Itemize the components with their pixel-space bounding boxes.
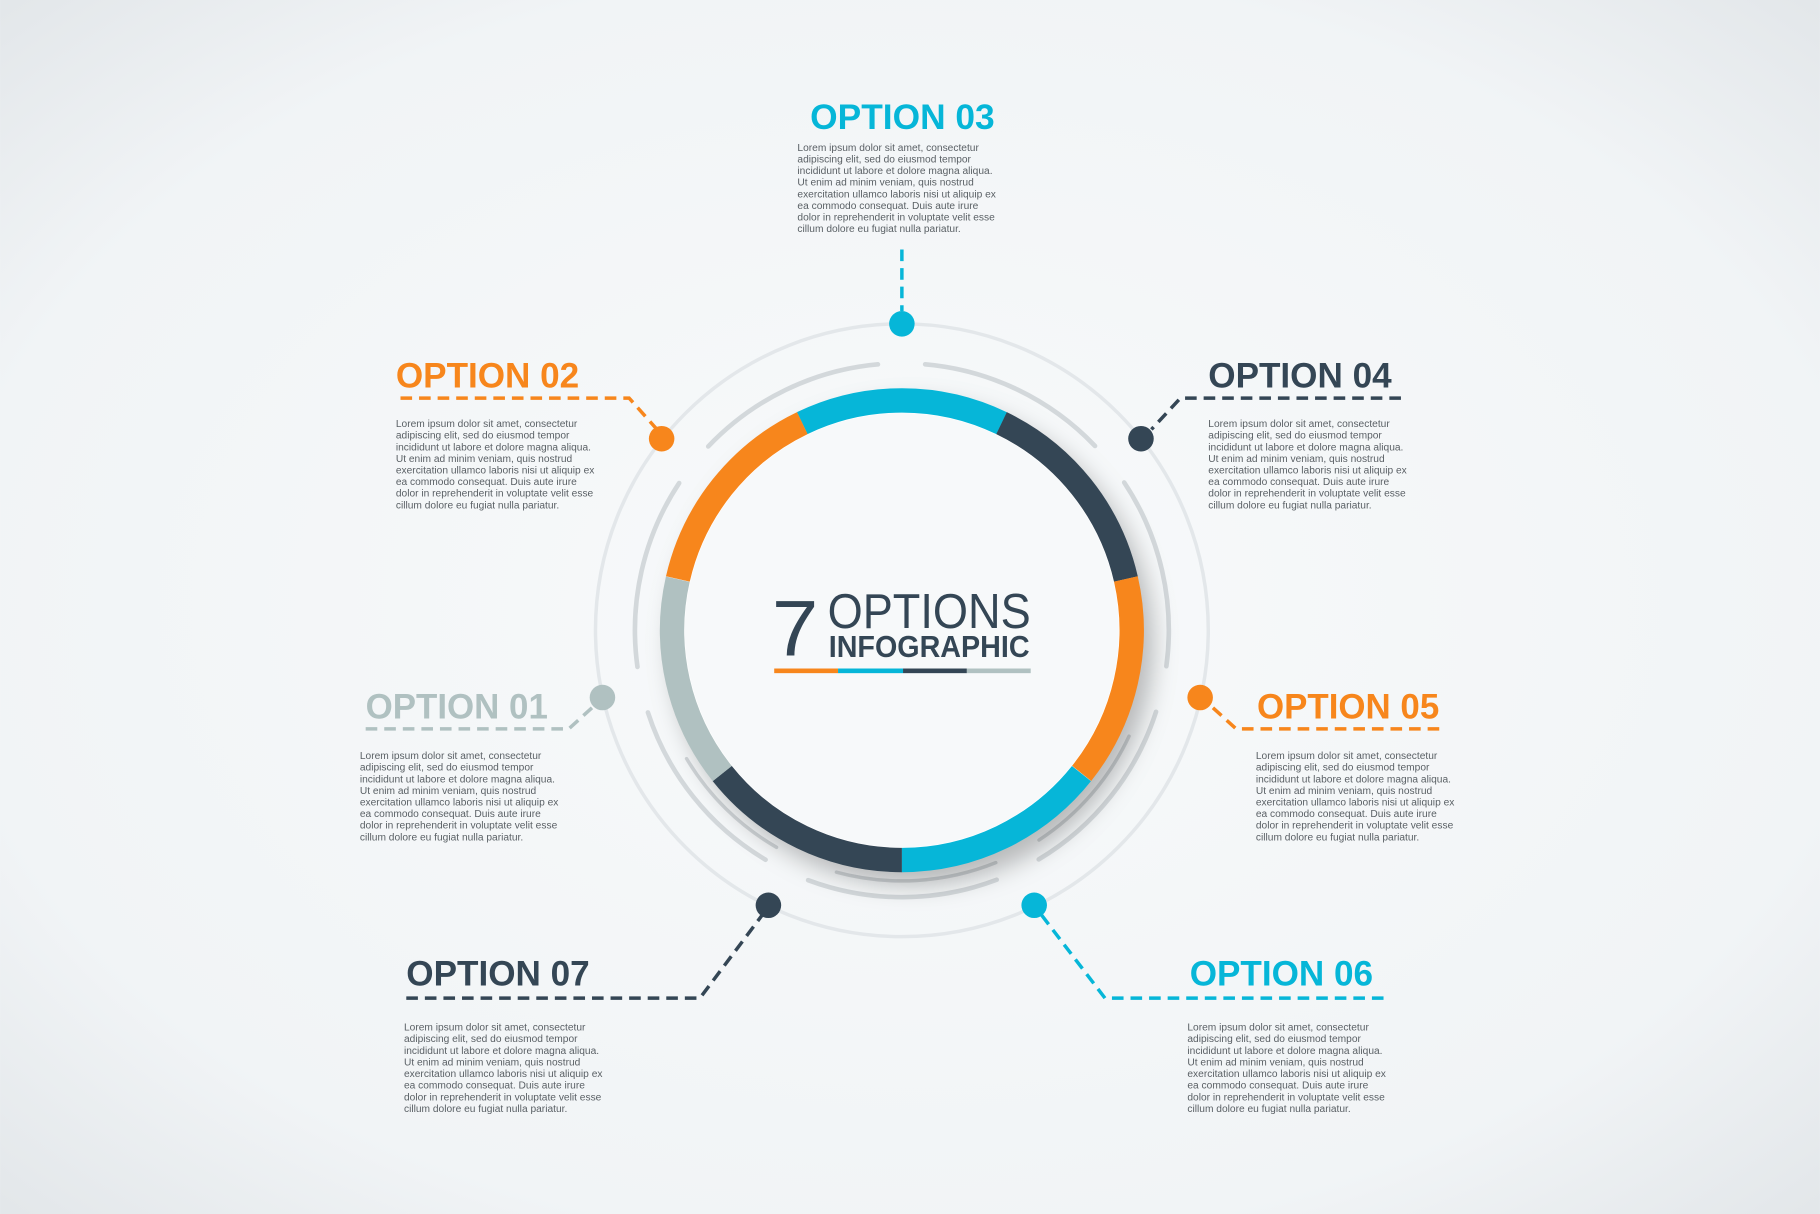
body text blocks: incididunt ut labore et dolore magna aliqua. — [396, 442, 591, 453]
body text blocks: ea commodo consequat. Duis aute irure — [1208, 477, 1390, 488]
body text blocks: Lorem ipsum dolor sit amet, consectetur — [404, 1023, 586, 1034]
body text blocks: cillum dolore eu fugiat nulla pariatur. — [360, 832, 523, 843]
body text blocks: incididunt ut labore et dolore magna aliqua. — [404, 1046, 599, 1057]
body text blocks: exercitation ullamco laboris nisi ut aliquip ex — [1187, 1069, 1386, 1080]
body text blocks: Ut enim ad minim veniam, quis nostrud — [360, 786, 537, 797]
body text blocks: incididunt ut labore et dolore magna aliqua. — [360, 774, 555, 785]
body text blocks: exercitation ullamco laboris nisi ut aliquip ex — [1208, 466, 1407, 477]
option headings: OPTION 07 — [406, 954, 590, 993]
body text blocks: exercitation ullamco laboris nisi ut aliquip ex — [1256, 797, 1454, 808]
body text blocks — [360, 143, 1454, 1115]
option headings — [366, 98, 1439, 993]
body text blocks: dolor in reprehenderit in voluptate velit esse — [404, 1092, 602, 1103]
body text blocks: ea commodo consequat. Duis aute irure — [404, 1081, 585, 1092]
center title: INFOGRAPHIC — [829, 631, 1030, 664]
body text blocks: exercitation ullamco laboris nisi ut aliquip ex — [360, 797, 558, 808]
body text blocks: dolor in reprehenderit in voluptate velit esse — [360, 821, 558, 832]
body text blocks: cillum dolore eu fugiat nulla pariatur. — [1187, 1104, 1351, 1115]
body text blocks: Lorem ipsum dolor sit amet, consectetur — [797, 143, 979, 154]
body text blocks: dolor in reprehenderit in voluptate velit esse — [1256, 821, 1454, 832]
body text blocks: ea commodo consequat. Duis aute irure — [360, 809, 541, 820]
body text blocks: adipiscing elit, sed do eiusmod tempor — [1208, 431, 1382, 442]
body text blocks: Lorem ipsum dolor sit amet, consectetur — [1256, 751, 1438, 762]
body text blocks: incididunt ut labore et dolore magna aliqua. — [797, 166, 993, 177]
body text blocks: exercitation ullamco laboris nisi ut aliquip ex — [396, 466, 594, 477]
body text blocks: cillum dolore eu fugiat nulla pariatur. — [404, 1104, 567, 1115]
body text blocks: Ut enim ad minim veniam, quis nostrud — [1187, 1057, 1364, 1068]
center title — [772, 585, 1031, 673]
body text blocks: Lorem ipsum dolor sit amet, consectetur — [1208, 419, 1390, 430]
body text blocks: dolor in reprehenderit in voluptate velit esse — [1208, 489, 1406, 500]
body text blocks: Ut enim ad minim veniam, quis nostrud — [797, 178, 974, 189]
body text blocks: adipiscing elit, sed do eiusmod tempor — [396, 431, 570, 442]
body text blocks: dolor in reprehenderit in voluptate velit esse — [1187, 1092, 1385, 1103]
center title: 7 — [772, 585, 818, 673]
center title: OPTIONS — [828, 585, 1031, 639]
option headings: OPTION 01 — [366, 687, 548, 726]
body text blocks: cillum dolore eu fugiat nulla pariatur. — [396, 500, 559, 511]
body text blocks: adipiscing elit, sed do eiusmod tempor — [797, 154, 972, 165]
option headings: OPTION 04 — [1208, 357, 1392, 396]
body text blocks: Ut enim ad minim veniam, quis nostrud — [1208, 454, 1385, 465]
option headings: OPTION 05 — [1257, 687, 1439, 726]
middle arcs — [524, 253, 1279, 1008]
body text blocks: ea commodo consequat. Duis aute irure — [1187, 1081, 1369, 1092]
body text blocks: ea commodo consequat. Duis aute irure — [396, 477, 577, 488]
body text blocks: dolor in reprehenderit in voluptate velit esse — [396, 489, 594, 500]
body text blocks: incididunt ut labore et dolore magna aliqua. — [1208, 442, 1403, 453]
option headings: OPTION 06 — [1190, 954, 1373, 993]
body text blocks: Ut enim ad minim veniam, quis nostrud — [1256, 786, 1433, 797]
body text blocks: adipiscing elit, sed do eiusmod tempor — [1187, 1034, 1362, 1045]
body text blocks: Lorem ipsum dolor sit amet, consectetur — [396, 419, 578, 430]
outer thin ring — [595, 324, 1208, 937]
body text blocks: adipiscing elit, sed do eiusmod tempor — [404, 1034, 578, 1045]
body text blocks: incididunt ut labore et dolore magna aliqua. — [1187, 1046, 1383, 1057]
body text blocks: cillum dolore eu fugiat nulla pariatur. — [1208, 500, 1372, 511]
body text blocks: Ut enim ad minim veniam, quis nostrud — [404, 1057, 581, 1068]
body text blocks: ea commodo consequat. Duis aute irure — [1256, 809, 1437, 820]
body text blocks: dolor in reprehenderit in voluptate velit esse — [797, 213, 995, 224]
body text blocks: incididunt ut labore et dolore magna aliqua. — [1256, 774, 1451, 785]
body text blocks: adipiscing elit, sed do eiusmod tempor — [1256, 763, 1430, 774]
connectors — [366, 250, 1439, 998]
body text blocks: exercitation ullamco laboris nisi ut aliquip ex — [404, 1069, 602, 1080]
option headings: OPTION 03 — [810, 98, 995, 137]
body text blocks: exercitation ullamco laboris nisi ut aliquip ex — [797, 189, 996, 200]
center ring with colored segments — [579, 307, 1225, 953]
dots — [590, 311, 1213, 918]
body text blocks: adipiscing elit, sed do eiusmod tempor — [360, 763, 534, 774]
option headings: OPTION 02 — [396, 357, 579, 396]
body text blocks: cillum dolore eu fugiat nulla pariatur. — [1256, 832, 1419, 843]
body text blocks: Lorem ipsum dolor sit amet, consectetur — [1187, 1023, 1369, 1034]
body text blocks: Lorem ipsum dolor sit amet, consectetur — [360, 751, 542, 762]
body text blocks: cillum dolore eu fugiat nulla pariatur. — [797, 224, 961, 235]
body text blocks: Ut enim ad minim veniam, quis nostrud — [396, 454, 573, 465]
body text blocks: ea commodo consequat. Duis aute irure — [797, 201, 979, 212]
